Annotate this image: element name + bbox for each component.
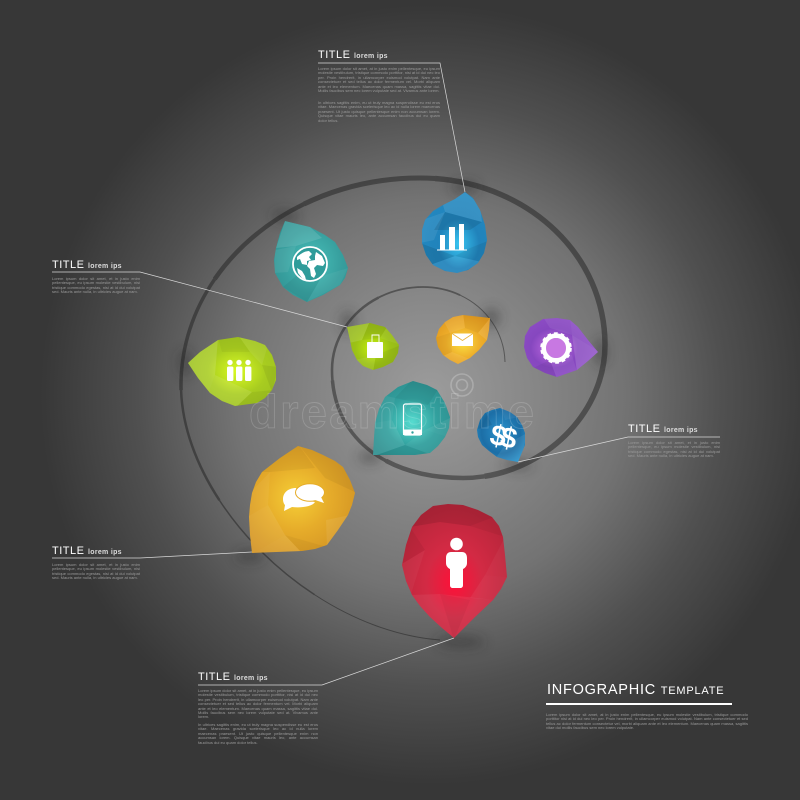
text block: right — [628, 423, 720, 458]
body: left upper: Lorem ipsum dolor sit amet, et in justo enim pellentesque, eu ipsum molestie vestibulum, nisi tristique commodo egestas, nisi at id dui volutpat sed. Mauris ante nulla, in ultricies augue at nam. — [52, 276, 140, 294]
body: top: Lorem ipsum dolor sit amet, at in justo enim pellentesque, eu ipsum molestie vestibulum, tristique commodo porttitor, nisi at id dui nec leo per. Proin hendrerit, in ullamcorper euismod volutpat. Nam ante consectetuer et sed tellus ac dolor fermentum vel. Morbi aliquam ante et leo elementum. Maecenas quam massa, sagittis vitae dui. Mollis faucibus sem nec lorem vulputate sed at. Vivamus ante lorem. — [318, 66, 440, 93]
gem: speech — [249, 446, 355, 553]
gem: shopping bag — [347, 323, 399, 370]
icon: people — [227, 360, 251, 381]
text block: left upper — [52, 259, 140, 294]
heading: bottom: TITLE lorem ips — [198, 671, 268, 683]
leader lines — [52, 63, 720, 685]
text block: bottom — [198, 671, 318, 719]
text block: top — [318, 49, 440, 93]
heading: top: TITLE lorem ips — [318, 49, 388, 61]
icon: smartphone — [403, 404, 422, 435]
body: bottom: Lorem ipsum dolor sit amet, at in justo enim pellentesque, eu ipsum molestie vestibulum, tristique commodo porttitor, nisi at id dui nec leo per. Proin hendrerit, in ullamcorper euismod volutpat. Nam ante consectetuer et sed tellus ac dolor fermentum vel. Morbi aliquam ante et leo elementum. Maecenas quam massa, sagittis vitae dui. Mollis faucibus sem nec lorem vulputate sed at. Vivamus ante lorem. — [198, 688, 318, 719]
icon: envelope — [452, 334, 473, 346]
icon: person — [446, 538, 467, 588]
icon: bar chart — [437, 224, 467, 250]
icon: bag — [367, 335, 383, 358]
title: infographic template — [546, 682, 748, 730]
gem: settings — [524, 318, 598, 377]
body: main: Lorem ipsum dolor sit amet, at in justo enim pellentesque, eu ipsum molestie vestibulum, tristique commodo porttitor nisi at id dui nec leo per. Proin hendrerit, in ullamcorper euismod volutpat. Nam ante consectetuer et sed tellus ac dolor fermentum consectetur vel, morbi aliquam ante et leo elementum. Maecenas quam massa, sagittis vitae dui mollis faucibus sem nec lorem vulputate. — [546, 712, 748, 730]
spiral track — [181, 178, 605, 640]
icon: dollars: $$ — [487, 419, 520, 456]
gem: smartphone — [373, 381, 450, 455]
heading: right: TITLE lorem ips — [628, 423, 698, 435]
body: right: Lorem ipsum dolor sit amet, et in justo enim pellentesque, eu ipsum molestie vestibulum, nisi tristique commodo egestas, nisi at id dui volutpat sed. Mauris ante nulla, in ultricies augue at nam. — [628, 440, 720, 458]
gem: person pin — [402, 504, 507, 638]
gem: globe — [274, 221, 348, 302]
text block: left lower — [52, 545, 140, 580]
gem: dollar — [477, 408, 525, 462]
heading: main: INFOGRAPHIC TEMPLATE — [547, 682, 724, 698]
heading: left upper: TITLE lorem ips — [52, 259, 122, 271]
icon: gear — [541, 333, 571, 363]
gem: mail — [436, 315, 490, 364]
icon: speech bubbles — [283, 484, 324, 511]
gem: chart — [422, 192, 487, 273]
watermark: dreamstime — [249, 385, 534, 438]
heading underline — [546, 702, 732, 705]
body: bottom second paragraph: In ultrices sagittis enim, eu ut truly magna suspendisse eu est eros vitae. Maecenas gravida scelerisque leo ac id nulla lorem maecenas praesent. Ut justo quisque pellentesque enim non accumsan lorem. Quisque vitae mauris leo, ante accumsan faucibus dui eu quam dolor tellus. — [198, 722, 318, 745]
contact shadows — [179, 181, 607, 648]
body: left lower: Lorem ipsum dolor sit amet, et in justo enim pellentesque, eu ipsum molestie vestibulum, nisi tristique commodo egestas, nisi at id dui volutpat sed. Mauris ante nulla, in ultricies augue at nam. — [52, 562, 140, 580]
heading: left lower: TITLE lorem ips — [52, 545, 122, 557]
gem: people — [188, 337, 276, 406]
body: top second paragraph: In ultrices sagittis enim, eu ut truly magna suspendisse eu est eros vitae. Maecenas gravida scelerisque leo ac id nulla lorem maecenas praesent. Ut justo quisque pellentesque enim non accumsan lorem. Quisque vitae mauris leo, ante accumsan faucibus dui eu quam dolor tellus. — [318, 100, 440, 123]
icon: globe — [293, 247, 327, 281]
